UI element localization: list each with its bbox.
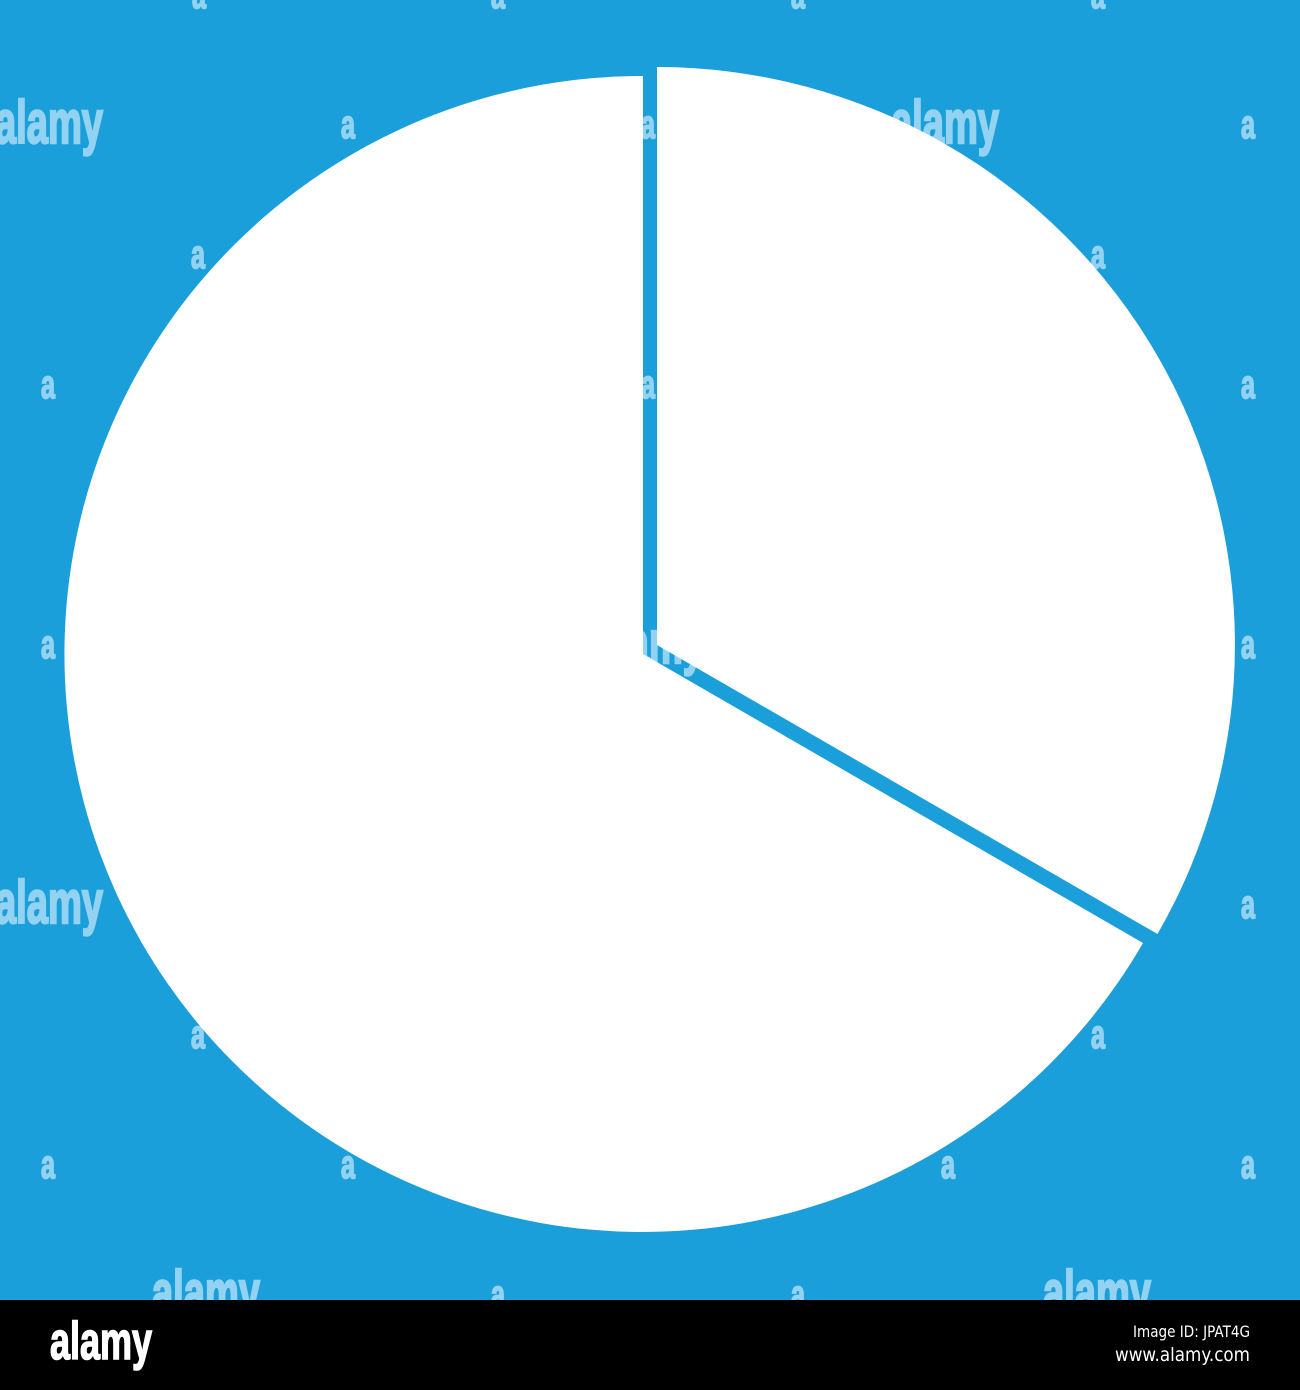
watermark pattern: alamy [1043, 1259, 1151, 1326]
watermark pattern: a [41, 363, 55, 407]
watermark pattern: a [1241, 623, 1255, 667]
watermark pattern: a [491, 1273, 505, 1317]
watermark pattern: a [41, 623, 55, 667]
watermark pattern: a [1091, 1013, 1105, 1057]
watermark pattern: a [191, 1013, 205, 1057]
watermark pattern: a [1241, 883, 1255, 927]
watermark pattern: a [191, 233, 205, 277]
pie slice: large two-thirds segment [64, 76, 1143, 1232]
watermark pattern: alamy [0, 89, 103, 156]
watermark pattern: a [1241, 1143, 1255, 1187]
footer bar [0, 1300, 1300, 1390]
watermark pattern: a [341, 1143, 355, 1187]
watermark pattern: alamy [152, 1259, 260, 1326]
watermark pattern: a [941, 1143, 955, 1187]
pie chart [64, 67, 1235, 1232]
website address: www.alamy.com [1115, 1344, 1250, 1366]
watermark pattern: a [641, 363, 655, 407]
watermark pattern: a [791, 1273, 805, 1317]
watermark pattern: a [1241, 363, 1255, 407]
watermark pattern: alamy [891, 89, 999, 156]
watermark pattern: a [1241, 103, 1255, 147]
watermark pattern: a [641, 103, 655, 147]
footer logo: alamy [50, 1312, 152, 1371]
watermark pattern: a [41, 1143, 55, 1187]
image id: Image ID: JPAT4G [1133, 1322, 1250, 1341]
watermark pattern: alamy [596, 609, 704, 676]
pie slice: smaller one-third segment [657, 67, 1235, 934]
watermark pattern: a [341, 103, 355, 147]
watermark pattern: alamy [0, 869, 103, 936]
watermark pattern: a [1091, 233, 1105, 277]
